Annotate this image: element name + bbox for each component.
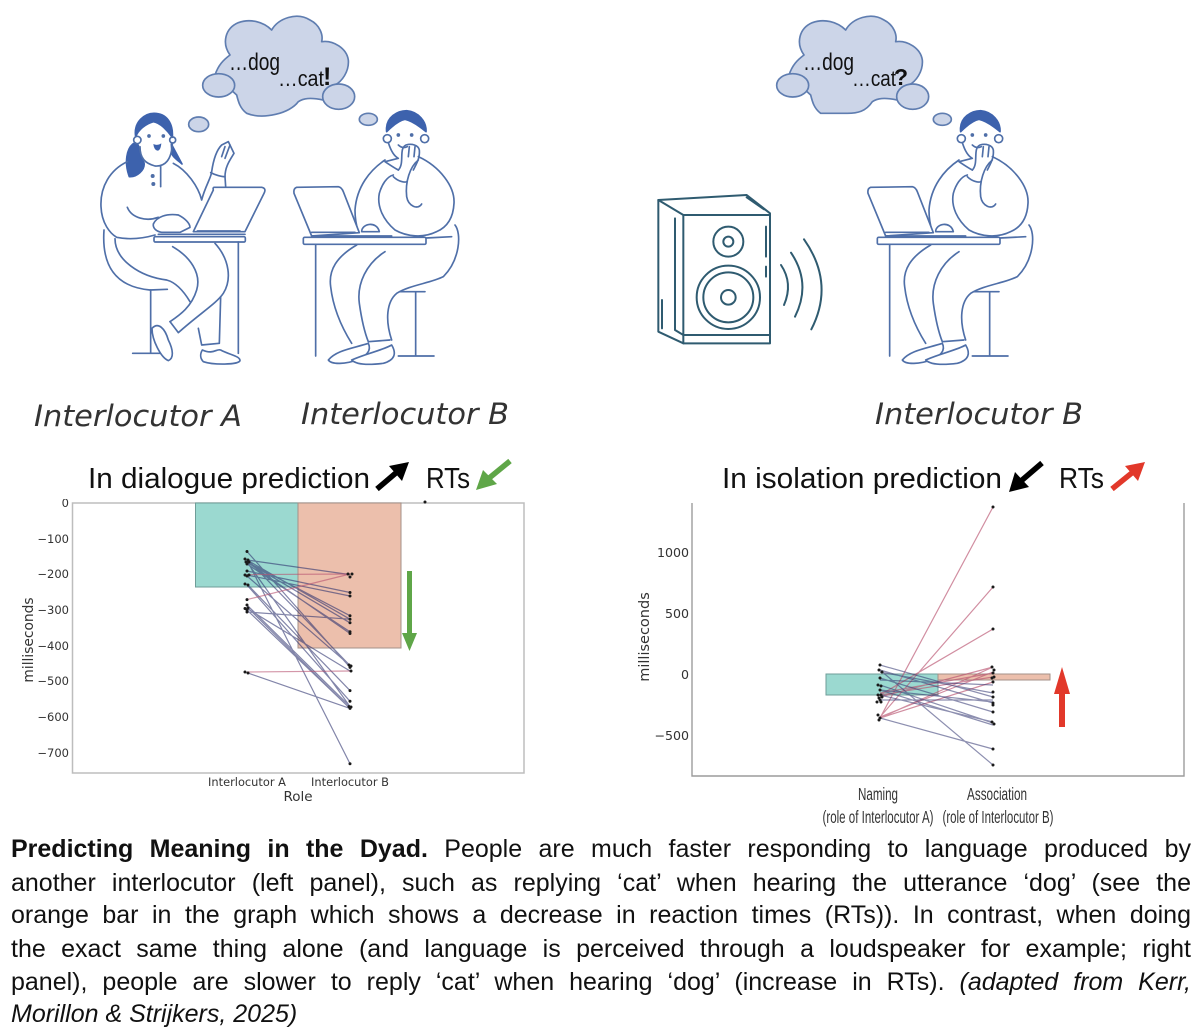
label: Interlocutor B: Interlocutor B — [301, 397, 509, 431]
label: Interlocutor B right: Interlocutor B — [875, 397, 1083, 431]
y axis labels: −200 — [37, 567, 69, 581]
x axis title: Role — [283, 789, 313, 805]
x axis labels: (role of Interlocutor B) — [942, 807, 1054, 827]
chart: dialogue bars — [21, 496, 524, 805]
heading: dialogue — [88, 461, 510, 495]
caption — [11, 835, 1191, 1028]
lines: participants faster — [880, 665, 993, 765]
person: Interlocutor A — [101, 113, 265, 364]
caption: panel), people are slower to reply ‘cat’ when hearing ‘dog’ (increase in RTs). (adapted from Kerr, — [11, 968, 1191, 996]
caption: Predicting Meaning in the Dyad. People are much faster responding to language produced by — [11, 835, 1191, 863]
y axis labels: −600 — [37, 710, 69, 724]
bar: Interlocutor A — [196, 503, 298, 587]
caption: Morillon & Strijkers, 2025) — [11, 1000, 297, 1028]
cloud text: dialogue: …cat — [278, 66, 324, 91]
heading: isolation: In isolation prediction — [722, 463, 1002, 495]
icon: black up arrow — [377, 462, 409, 489]
heading: isolation — [722, 462, 1145, 495]
icon: green down arrow — [476, 461, 510, 490]
lines: participants positive — [247, 574, 350, 672]
heading: dialogue: In dialogue prediction — [88, 463, 370, 495]
y axis labels — [654, 545, 689, 743]
cloud text: isolation: …dog — [803, 49, 854, 76]
heading: isolation: RTs — [1059, 463, 1104, 495]
y axis labels: −500 — [654, 728, 689, 743]
y axis labels: −100 — [37, 532, 69, 546]
data points — [245, 502, 425, 764]
arrow: green decrease — [402, 571, 417, 651]
y axis labels: −300 — [37, 603, 69, 617]
icon: loudspeaker — [658, 195, 822, 343]
data points — [877, 507, 994, 765]
person: Interlocutor B — [294, 111, 459, 364]
y axis labels: 500 — [665, 606, 689, 621]
cloud text: isolation — [803, 49, 908, 91]
cloud text: dialogue: ! — [323, 63, 331, 91]
x axis labels — [208, 775, 389, 789]
y axis labels: −400 — [37, 639, 69, 653]
cloud text: dialogue: …dog — [229, 49, 280, 76]
y axis title: milliseconds — [21, 597, 37, 683]
thought cloud — [777, 16, 951, 125]
person: Interlocutor B — [868, 111, 1033, 364]
x axis labels — [822, 784, 1054, 827]
cloud text: dialogue — [229, 49, 331, 91]
y axis labels: 0 — [681, 667, 689, 682]
y axis labels: −500 — [37, 674, 69, 688]
y axis labels: 0 — [62, 496, 69, 510]
icon: red up arrow — [1112, 462, 1145, 489]
y axis labels: 1000 — [657, 545, 689, 560]
x axis labels: (role of Interlocutor A) — [822, 807, 934, 827]
label: Interlocutor A: Interlocutor A — [34, 399, 242, 433]
panel: dialogue illustration — [101, 16, 459, 364]
lines: participants slower — [880, 507, 993, 718]
cloud text: isolation: …cat — [852, 66, 896, 91]
y axis labels — [37, 496, 69, 760]
arrow: red increase — [1054, 667, 1070, 727]
icon: black down arrow — [1009, 463, 1042, 492]
lines: participants negative — [247, 552, 350, 764]
bar: Association — [938, 674, 1050, 680]
chart: isolation bars — [637, 503, 1184, 827]
caption: the exact same thing alone (and language is perceived through a loudspeaker for example; right — [11, 935, 1191, 963]
bar: Naming — [826, 674, 938, 695]
cloud text: isolation: ? — [894, 64, 908, 90]
heading: dialogue: RTs — [426, 463, 470, 495]
x axis labels: Association — [967, 784, 1027, 804]
x axis labels: Naming — [858, 784, 898, 804]
bar: Interlocutor B — [298, 503, 401, 648]
y axis labels: −700 — [37, 746, 69, 760]
y axis title: milliseconds — [637, 592, 653, 682]
x axis labels: Interlocutor B — [311, 775, 389, 789]
sound waves — [781, 239, 822, 329]
thought cloud — [189, 16, 377, 132]
caption: orange bar in the graph which shows a decrease in reaction times (RTs)). In contrast, when doing — [11, 901, 1191, 929]
caption: another interlocutor (left panel), such as replying ‘cat’ when hearing the utterance ‘dog’ (see the — [11, 869, 1191, 897]
panel: isolation illustration — [777, 16, 1033, 364]
x axis labels: Interlocutor A — [208, 775, 286, 789]
